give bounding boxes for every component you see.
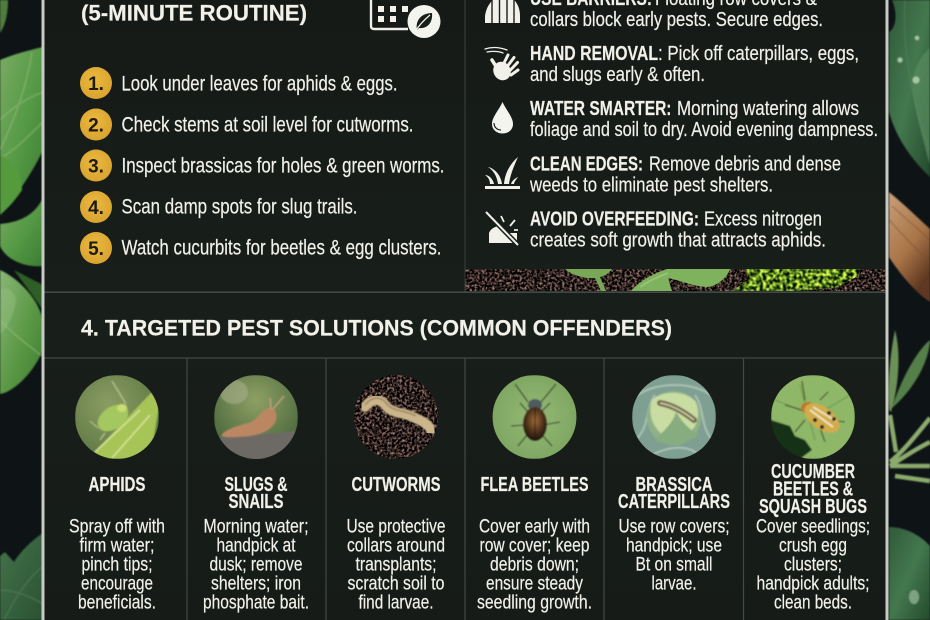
checklist item 1: 1. <box>88 74 104 95</box>
advice <box>618 516 730 594</box>
advice: seedling growth. <box>477 592 592 614</box>
pest name: SNAILS <box>228 491 284 513</box>
tip: clean edges: Remove debris and dense <box>649 152 841 176</box>
advice <box>756 516 870 614</box>
checklist item 4: 4. <box>88 198 104 219</box>
photo: slug on rock <box>214 375 300 460</box>
checklist item 4: Scan damp spots for slug trails. <box>122 196 358 218</box>
tip: hand removal <box>485 42 859 86</box>
panel: cutworms <box>346 375 446 614</box>
checklist item 3: 3. <box>88 156 104 178</box>
left basil leaves <box>0 0 43 620</box>
advice: ensure steady <box>486 572 583 594</box>
tip: avoid overfeeding: Excess nitrogen <box>704 208 822 230</box>
checklist item 3 <box>80 150 444 182</box>
tip: water smarter: Morning watering allows <box>677 97 859 120</box>
pest name <box>759 461 867 518</box>
pest name: BRASSICA <box>636 474 712 496</box>
advice: dusk; remove <box>210 554 302 576</box>
checklist item 2: 2. <box>88 116 104 136</box>
pest name: CUCUMBER <box>771 461 855 483</box>
tip: hand removal: and slugs early & often. <box>530 63 705 86</box>
pest name: BEETLES & <box>773 478 853 500</box>
pest name: APHIDS <box>88 474 146 496</box>
tip: clean edges: weeds to eliminate pest shelters. <box>529 174 773 196</box>
checklist item 3: Inspect brassicas for holes & green worms. <box>122 154 444 178</box>
tip: avoid overfeeding <box>486 208 826 252</box>
tip: avoid overfeeding: creates soft growth that attracts aphids. <box>530 228 826 252</box>
panel: aphids <box>69 375 165 614</box>
checklist item 1: Look under leaves for aphids & eggs. <box>122 72 398 96</box>
advice: phosphate bait. <box>203 592 309 614</box>
advice: handpick adults; <box>756 572 870 594</box>
panel: flea beetles <box>477 375 592 614</box>
advice: handpick at <box>216 534 296 556</box>
photo: cucumber beetle on leaf <box>771 375 855 459</box>
checklist item 2: Check stems at soil level for cutworms. <box>122 114 414 136</box>
checklist item 4 <box>80 191 358 223</box>
advice: collars around <box>347 534 445 556</box>
right leaves, tool handle and rosemary <box>888 0 930 620</box>
checklist item 5: 5. <box>88 239 104 260</box>
tip: clean edges: CLEAN EDGES: <box>530 152 643 176</box>
panel: 5-minute routine <box>80 0 444 264</box>
tip: use barriers <box>485 0 823 31</box>
pest name <box>224 474 288 513</box>
advice: transplants; <box>356 554 436 576</box>
panel: slugs and snails <box>203 375 309 614</box>
tip: hand removal: : Pick off caterpillars, eggs, <box>658 42 859 65</box>
advice: firm water; <box>80 534 154 556</box>
tip: hand removal: HAND REMOVAL <box>530 42 658 65</box>
checklist item 5: Watch cucurbits for beetles & egg clusters. <box>122 236 442 260</box>
icon: calendar with leaf <box>371 0 440 38</box>
advice: debris down; <box>490 554 579 576</box>
pest name: CUTWORMS <box>352 474 440 496</box>
checklist item 5 <box>80 232 442 264</box>
pest name <box>618 474 730 513</box>
tip: clean edges <box>485 152 841 196</box>
tip: use barriers: collars block early pests. Secure edges. <box>530 8 823 31</box>
photo: aphid on stem <box>75 375 160 459</box>
advice: beneficials. <box>78 592 156 614</box>
pest name: SQUASH BUGS <box>759 496 867 518</box>
advice: clean beds. <box>774 592 852 614</box>
advice: scratch soil to <box>348 572 445 594</box>
routine heading: (5-MINUTE ROUTINE) <box>81 0 307 26</box>
section 4 heading: 4. TARGETED PEST SOLUTIONS (COMMON OFFENDERS) <box>81 316 672 341</box>
advice: Morning water; <box>204 516 308 538</box>
advice: Cover seedlings; <box>756 516 870 538</box>
tip: water smarter: WATER SMARTER: <box>530 97 672 120</box>
tip: avoid overfeeding: AVOID OVERFEEDING: <box>530 208 699 230</box>
advice: Use protective <box>346 516 446 538</box>
photo: flea beetle on leaf <box>492 375 577 459</box>
divider above section 4 <box>44 292 886 293</box>
pest table grid <box>44 358 886 620</box>
advice <box>69 516 165 614</box>
panel: cucumber beetles and squash bugs <box>756 375 870 614</box>
pest name: CATERPILLARS <box>618 491 730 513</box>
pest name: SLUGS & <box>224 474 288 496</box>
advice: shelters; iron <box>211 572 301 594</box>
advice: larvae. <box>652 572 696 594</box>
advice <box>346 516 446 614</box>
panel frame <box>42 0 44 620</box>
advice: find larvae. <box>358 592 434 614</box>
advice: clusters; <box>784 554 842 576</box>
advice: crush egg <box>779 534 847 556</box>
pest name: FLEA BEETLES <box>480 474 588 496</box>
panel: prevention tips <box>485 0 878 252</box>
photo: cutworm on soil <box>354 375 438 459</box>
advice: Bt on small <box>636 554 712 576</box>
photo: caterpillar on cabbage <box>632 375 716 459</box>
advice: pinch tips; <box>82 554 152 576</box>
panel: brassica caterpillars <box>618 375 730 594</box>
advice: Cover early with <box>479 516 590 538</box>
divider between top columns <box>464 0 466 292</box>
advice <box>203 516 309 614</box>
advice <box>477 516 592 614</box>
soil and seedlings strip <box>466 269 886 291</box>
advice: encourage <box>81 572 153 594</box>
advice: Spray off with <box>69 516 165 538</box>
tip: water smarter <box>492 97 878 141</box>
advice: handpick; use <box>626 534 722 556</box>
advice: Use row covers; <box>618 516 730 538</box>
advice: row cover; keep <box>480 534 590 556</box>
checklist item 1 <box>80 67 398 99</box>
checklist item 2 <box>80 108 414 140</box>
